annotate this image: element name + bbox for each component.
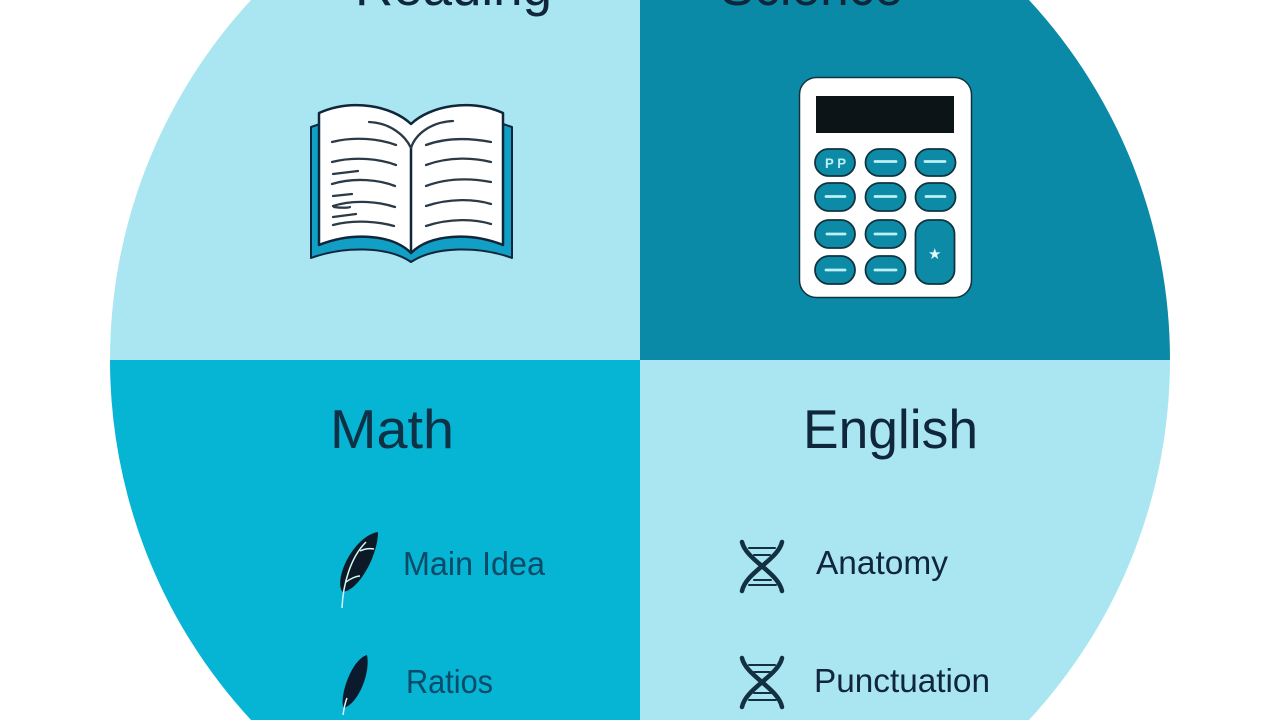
panel: Math quadrant <box>110 360 640 720</box>
icon: feather large <box>340 532 378 608</box>
icon: calculator <box>800 78 972 298</box>
icon: calculator: P P <box>825 155 846 171</box>
icon: calculator: ★ <box>928 245 941 263</box>
heading: English: English <box>803 398 978 460</box>
icon: DNA helix bottom <box>742 658 782 707</box>
panel: Reading quadrant <box>110 0 640 360</box>
calculator display <box>816 96 954 133</box>
icon: feather small <box>343 655 368 715</box>
calculator keys <box>815 149 956 284</box>
heading: Math: Math <box>330 398 454 460</box>
icon: DNA helix top <box>742 542 782 591</box>
label: Ratios: Ratios <box>406 663 493 700</box>
label: Anatomy: Anatomy <box>816 544 948 581</box>
icon: open book <box>311 105 512 262</box>
label: Punctuation: Punctuation <box>814 662 990 699</box>
panel: Science quadrant <box>640 0 1170 360</box>
panel: English quadrant <box>640 360 1170 720</box>
label: Main Idea: Main Idea <box>403 545 546 582</box>
